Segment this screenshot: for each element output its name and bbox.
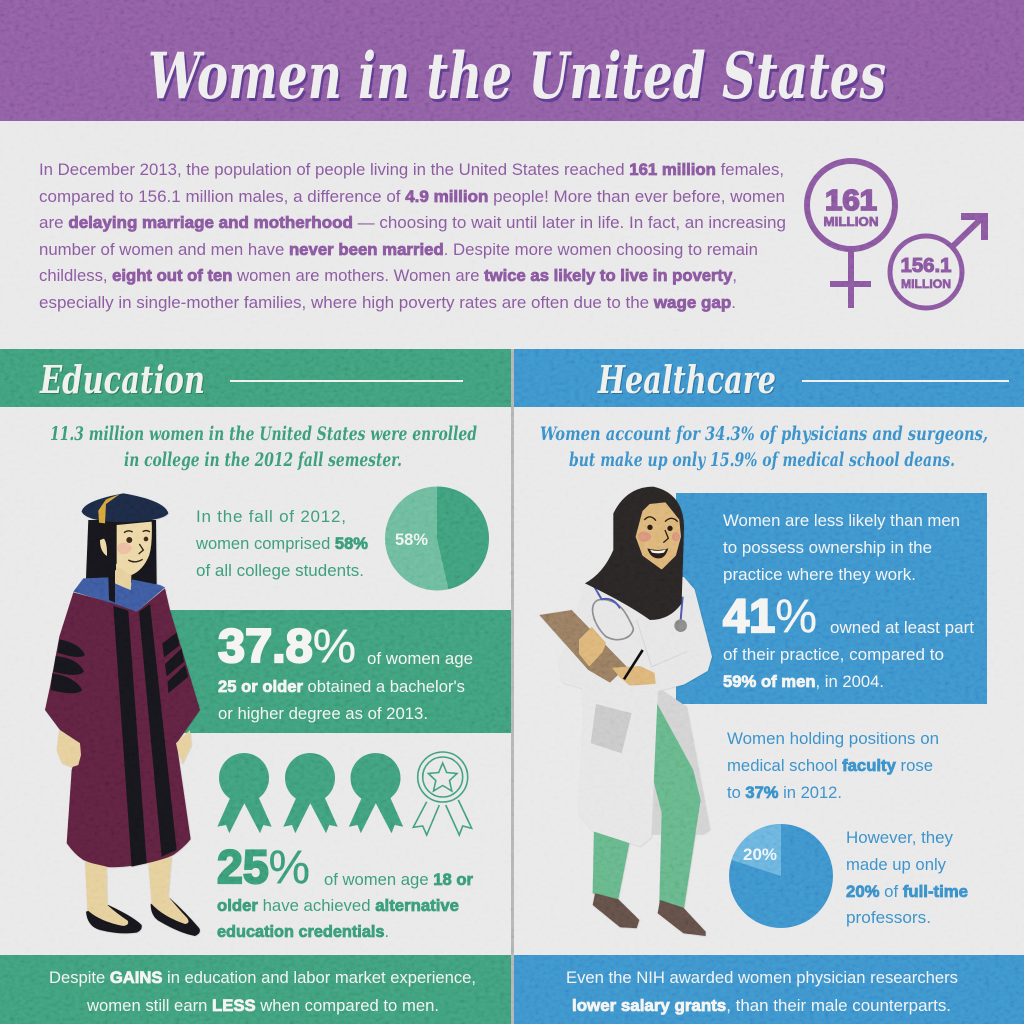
education footer [0, 955, 511, 1024]
icon: male symbol with 156.1 million: 156.1 [900, 255, 952, 277]
green callout: 37.8%: or higher degree as of 2013. [218, 704, 428, 723]
graduate figure [45, 493, 200, 936]
intro paragraph: In December 2013, the population of people living in the United States reached 161 million females, [39, 160, 784, 179]
green callout: 37.8%: 25 or older obtained a bachelor's [218, 677, 465, 696]
education heading bar: Education [39, 357, 205, 402]
healthcare heading bar: Healthcare [597, 357, 776, 402]
pie chart: 20% [729, 824, 833, 928]
doctor figure [539, 487, 711, 936]
education subheading: in college in the 2012 fall semester. [124, 449, 402, 471]
faculty text: medical school faculty rose [727, 756, 933, 775]
college students text [195, 507, 368, 580]
icon: female symbol with 161 million [807, 161, 895, 308]
stat: 25% credentials [217, 840, 473, 941]
icon: male symbol with 156.1 million [890, 213, 988, 308]
stat: 25% credentials: 25% [217, 840, 310, 893]
college students text: In the fall of 2012, [196, 507, 346, 526]
intro paragraph: especially in single-mother families, where high poverty rates are often due to the wage gap. [39, 293, 736, 312]
icon: male symbol with 156.1 million: MILLION [901, 277, 951, 291]
green callout: 37.8% [170, 610, 511, 733]
intro paragraph: are delaying marriage and motherhood — choosing to wait until later in life. In fact, an increasing [39, 213, 786, 232]
pie chart: 20%: 20% [743, 845, 777, 864]
education subheading: 11.3 million women in the United States were enrolled [50, 423, 477, 445]
blue callout: 41% ownership: owned at least part [830, 618, 974, 637]
intro paragraph: compared to 156.1 million males, a difference of 4.9 million people! More than ever before, women [39, 187, 785, 206]
healthcare heading bar [514, 349, 1024, 407]
green callout: 37.8%: 37.8% [218, 619, 356, 672]
blue callout: 41% ownership: practice where they work. [723, 565, 916, 584]
stat: 25% credentials: education credentials. [217, 922, 389, 941]
healthcare footer [514, 955, 1024, 1024]
professors text: professors. [846, 908, 931, 927]
education heading bar [0, 349, 511, 407]
blue callout: 41% ownership: of their practice, compared to [723, 645, 944, 664]
pie chart: 58%: 58% [395, 530, 428, 549]
icon: female symbol with 161 million: 161 [825, 185, 877, 217]
header banner [0, 0, 1024, 121]
blue callout: 41% ownership: 59% of men, in 2004. [723, 672, 884, 691]
education subheading [50, 423, 477, 471]
intro paragraph [39, 160, 786, 312]
healthcare footer: lower salary grants, than their male counterparts. [572, 996, 951, 1015]
professors text: However, they [846, 828, 953, 847]
stat: 25% credentials: older have achieved alternative [217, 896, 459, 915]
blue callout: 41% ownership: Women are less likely than men [723, 511, 960, 530]
blue callout: 41% ownership: 41% [723, 589, 817, 642]
college students text: women comprised 58% [195, 534, 368, 553]
faculty text: to 37% in 2012. [727, 783, 842, 802]
intro paragraph: childless, eight out of ten women are mothers. Women are twice as likely to live in poverty, [39, 266, 737, 285]
professors text: 20% of full-time [846, 882, 968, 901]
blue callout: 41% ownership [676, 493, 987, 704]
education footer: women still earn LESS when compared to men. [86, 996, 439, 1015]
professors text [846, 828, 968, 927]
healthcare footer: Even the NIH awarded women physician researchers [566, 968, 958, 987]
icon: female symbol with 161 million: MILLION [824, 214, 878, 229]
intro paragraph: number of women and men have never been married. Despite more women choosing to remain [39, 240, 758, 259]
stat: 25% credentials: of women age 18 or [324, 870, 473, 889]
professors text: made up only [846, 855, 946, 874]
faculty text: Women holding positions on [727, 729, 939, 748]
pie chart: 58% [385, 486, 489, 590]
college students text: of all college students. [196, 561, 364, 580]
faculty text [727, 729, 939, 802]
healthcare subheading [540, 423, 988, 471]
blue callout: 41% ownership: to possess ownership in the [723, 538, 932, 557]
green callout: 37.8%: of women age [367, 649, 473, 668]
panel: education [0, 349, 511, 1024]
icon: award ribbons [217, 752, 472, 835]
panel: healthcare [514, 349, 1024, 1024]
education footer: Despite GAINS in education and labor market experience, [49, 968, 476, 987]
